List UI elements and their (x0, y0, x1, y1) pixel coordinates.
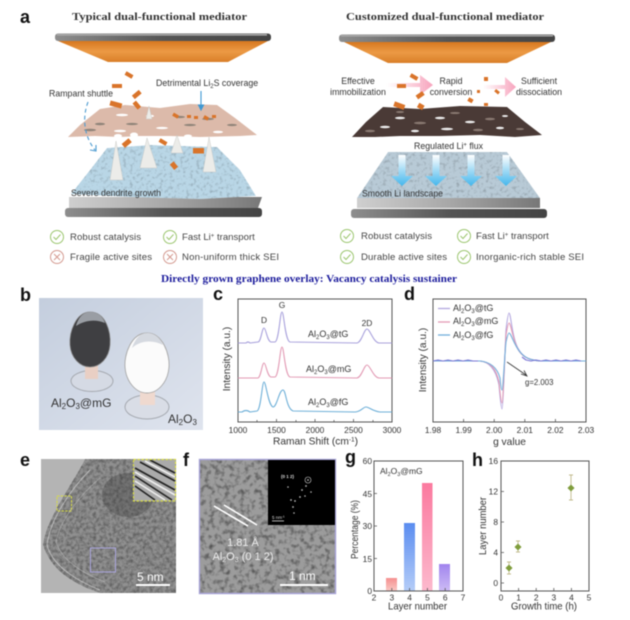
x tick labels (499, 592, 592, 602)
x tick labels: 3 (551, 592, 556, 602)
x tick labels: 1.98 (425, 425, 441, 435)
callout: regulated flux: flux (467, 141, 484, 151)
customized cell illustration (330, 34, 562, 218)
callout: Li2S coverage: 2 (210, 84, 214, 90)
y tick labels: 12 (489, 486, 498, 496)
series label tG: @tG (330, 329, 348, 339)
chart label: 3 (397, 472, 400, 478)
legend: 3 (471, 322, 475, 328)
panel label d: d (404, 284, 415, 304)
label: Al2O3: Al (168, 412, 179, 426)
series label mG: 2 (314, 370, 318, 376)
callout: effective immobilization (330, 76, 386, 97)
arrow: coverage pointer (198, 91, 204, 110)
x axis title: -1 (349, 436, 355, 444)
x tick labels: 2000 (306, 425, 325, 435)
panel a: dual-functional mediator schematics (20, 7, 584, 285)
arrows: regulated Li+ flux (391, 155, 517, 186)
panel f: HRTEM image (183, 450, 336, 594)
callout: sufficient dissociation: Sufficient (521, 76, 558, 86)
y tick labels: 60 (363, 456, 372, 466)
smooth lithium anode (351, 152, 547, 218)
panel label a: a (20, 7, 31, 27)
arrows: pink conversion flow (387, 75, 516, 97)
arrow: dashed shuttle path (85, 102, 96, 151)
item: fast transport: transport (508, 231, 549, 242)
scale bar 5 nm: 5 nm (137, 570, 164, 584)
baseline noise (433, 357, 581, 361)
y tick labels: 16 (489, 456, 498, 466)
item: fast transport: + (211, 234, 215, 240)
x tick labels: 4 (569, 592, 574, 602)
series label mG: O (317, 364, 324, 374)
y axis title: Intensity (a.u.) (418, 328, 429, 392)
chart label: 2 (388, 472, 391, 478)
legend (438, 303, 498, 342)
axes frame (501, 461, 589, 591)
series label fG: @fG (330, 397, 348, 407)
legend: O (464, 316, 471, 326)
label: Al2O3: O (183, 412, 192, 426)
vial: Al2O3@mG (70, 312, 113, 392)
series label fG: 3 (326, 403, 330, 409)
inset with lattice fringes (134, 460, 176, 501)
x tick labels: 2.01 (517, 425, 533, 435)
callout: rapid conversion (430, 76, 472, 97)
cathode plate with orange layer (55, 34, 271, 62)
x tick labels: 2 (372, 592, 377, 602)
x tick labels: 5 (587, 592, 592, 602)
heading: typical mediator: Typical dual-functional mediator (72, 12, 247, 23)
yellow selection box (57, 496, 72, 511)
purple selection box (90, 548, 116, 572)
lattice annotation (212, 536, 274, 564)
legend: Al (453, 330, 461, 340)
x tick labels: 1500 (267, 425, 286, 435)
legend: Al (453, 316, 461, 326)
curve: Al2O3@fG (433, 333, 586, 390)
micrograph (200, 460, 336, 594)
y tick labels: 30 (363, 521, 372, 531)
legend: 2 (461, 309, 465, 315)
micrograph (41, 459, 176, 593)
item: fast transport: transport (214, 232, 255, 243)
x tick labels: 7 (461, 592, 466, 602)
lattice annotation: Al (212, 551, 222, 563)
data points with error bars (505, 475, 575, 574)
item: fast transport: + (505, 232, 509, 238)
label: Al2O3@mG: 3 (75, 402, 80, 411)
panel label c: c (213, 284, 223, 304)
lattice spacing lines (214, 505, 257, 526)
callout: rampant shuttle: Rampant shuttle (49, 88, 113, 98)
heading: customized mediator: Customized dual-functional mediator (346, 12, 544, 23)
legend: 3 (471, 309, 475, 315)
peak label 2D: 2D (362, 318, 372, 328)
x tick labels: 0 (499, 592, 504, 602)
x axis title: ) (355, 436, 358, 448)
FFT inset: -1 (282, 514, 285, 518)
annotation arrow to g value (507, 362, 527, 376)
callout: effective immobilization: immobilization (330, 87, 386, 97)
callout: Li2S coverage: S coverage (214, 78, 258, 88)
y tick labels: 15 (363, 554, 372, 564)
legend: @tG (475, 303, 493, 313)
x tick labels: 2.02 (547, 425, 564, 435)
orange polysulfide particles (109, 71, 216, 170)
y tick labels: 0 (493, 578, 498, 588)
lattice annotation: 3 (235, 557, 239, 564)
y tick labels (363, 456, 372, 596)
callout: sufficient dissociation: dissociation (516, 87, 562, 97)
callout: rapid conversion: Rapid (440, 76, 463, 86)
panel g: layer distribution bar chart (345, 447, 466, 612)
item: fragile sites: Fragile active sites (70, 252, 152, 263)
x tick labels (229, 425, 402, 435)
item: robust catalysis (50, 230, 141, 244)
x tick labels: 3 (389, 592, 394, 602)
photo background (39, 298, 203, 430)
typical cell illustration (49, 34, 271, 217)
series label tG: O (319, 329, 326, 339)
scale bar 5 nm (136, 570, 170, 586)
item: fast transport: Fast Li (182, 232, 211, 243)
y axis title: Layer number (478, 496, 489, 555)
x axis title: Raman Shift (cm (273, 436, 349, 448)
panel b: sample photograph (20, 285, 203, 430)
cathode plate with orange layer (339, 34, 555, 63)
panel c: Raman spectra (213, 284, 402, 448)
item: fragile sites (50, 250, 152, 264)
x axis title: g value (493, 437, 526, 448)
x tick labels (425, 425, 594, 435)
item: fast transport: Fast Li (476, 231, 505, 242)
chart label: O (391, 466, 398, 476)
axes frame (238, 299, 392, 422)
damaged pink membrane (68, 104, 257, 138)
dark graphene membrane (352, 106, 542, 137)
lithium anode with blue surface (65, 145, 262, 217)
series label mG: @mG (328, 364, 351, 374)
item: fast transport (458, 230, 549, 242)
axes frame (433, 299, 586, 422)
y axis title: Percentage (%) (350, 500, 361, 559)
y tick labels: 8 (493, 517, 498, 527)
legend: 2 (461, 322, 465, 328)
curve: Al2O3@tG (433, 313, 586, 409)
callout: rapid conversion: conversion (430, 87, 472, 97)
y tick labels: 45 (363, 489, 372, 499)
legend: Al (453, 303, 461, 313)
x axis title: Layer number (388, 602, 448, 612)
x tick labels: 1000 (229, 425, 248, 435)
curve: Al2O3@tG (238, 312, 392, 343)
series label mG: 3 (324, 370, 328, 376)
label: Al2O3@mG: @mG (80, 396, 111, 410)
x tick labels: 4 (407, 592, 412, 602)
callout: regulated flux: + (463, 142, 467, 148)
curve: Al2O3@fG (238, 382, 392, 412)
chart label: Al (380, 466, 388, 476)
callout: effective immobilization: Effective (341, 76, 375, 86)
scale bar 1 nm (280, 569, 328, 586)
item: durable sites (340, 250, 447, 264)
orange particles (393, 73, 500, 110)
legend: @mG (475, 316, 498, 326)
series label fG: O (319, 397, 326, 407)
y axis title: Intensity (a.u.) (222, 327, 233, 391)
scale bar 1 nm: 1 nm (289, 569, 316, 583)
callout: regulated flux: Regulated Li (414, 141, 463, 151)
callout: sufficient dissociation (516, 76, 562, 97)
curve: Al2O3@mG (433, 323, 586, 403)
caption: graphene overlay: Directly grown graphene overlay: Vacancy catalysis sustainer (161, 274, 458, 285)
series label mG: Al (306, 364, 314, 374)
legend: 2 (461, 336, 465, 342)
checklist: typical mediator (50, 230, 279, 264)
item: non-uniform SEI: Non-uniform thick SEI (182, 252, 279, 263)
curve: Al2O3@mG (238, 347, 392, 378)
legend: O (464, 330, 471, 340)
peak label D: D (261, 315, 267, 325)
item: fast transport (164, 230, 255, 244)
series label tG: Al (308, 329, 316, 339)
x tick labels: 6 (443, 592, 448, 602)
panel d: EPR spectra (404, 284, 594, 448)
x tick labels: 2 (534, 592, 539, 602)
lattice annotation: O (226, 551, 235, 563)
x tick labels: 2500 (344, 425, 363, 435)
chart label: @mG (400, 466, 423, 476)
series label tG: 2 (316, 335, 320, 341)
x tick labels: 5 (425, 592, 430, 602)
legend: @fG (475, 330, 493, 340)
axes frame (374, 461, 463, 591)
lattice annotation: (0 1 2) (239, 551, 274, 563)
series label tG: 3 (326, 335, 330, 341)
x tick labels (372, 592, 466, 602)
FFT inset: (0 1 2) (281, 474, 295, 479)
x tick labels: 3000 (383, 425, 402, 435)
y tick labels: 4 (493, 548, 498, 558)
label: Al2O3@mG: 2 (62, 402, 67, 411)
checklist: customized mediator (340, 230, 584, 264)
panel label e: e (20, 450, 30, 470)
lattice annotation: 1.81 Å (227, 536, 260, 549)
FFT inset (268, 460, 335, 525)
series label fG: 2 (316, 403, 320, 409)
panel h: layer number vs growth time (472, 450, 592, 612)
panel label f: f (183, 450, 190, 470)
callout: smooth landscape: Smooth Li landscape (362, 188, 443, 198)
vial: Al2O3 (125, 333, 169, 419)
y tick labels: 0 (367, 586, 372, 596)
y tick labels (489, 456, 498, 588)
callout: Li2S coverage: Detrimental Li (156, 78, 210, 88)
panel label h: h (472, 450, 483, 470)
item: robust catalysis (340, 230, 432, 242)
legend: O (464, 303, 471, 313)
label: Al2O3@mG: Al (51, 396, 62, 410)
x tick labels: 2.03 (578, 425, 594, 435)
legend: 3 (471, 336, 475, 342)
item: robust catalysis: Robust catalysis (361, 231, 432, 242)
x tick labels: 2.00 (486, 425, 503, 435)
series label fG: Al (308, 397, 316, 407)
x axis title: Growth time (h) (511, 602, 577, 612)
panel label b: b (20, 285, 31, 305)
item: inorganic-rich SEI: Inorganic-rich stable SEI (476, 252, 584, 263)
bars (386, 483, 450, 591)
x tick labels: 1.99 (455, 425, 472, 435)
lithium dendrites (110, 106, 216, 180)
annotation g value: g=2.003 (525, 378, 553, 387)
peak label G: G (279, 300, 285, 310)
callout: dendrite growth: Severe dendrite growth (71, 188, 161, 198)
item: durable sites: Durable active sites (361, 252, 447, 263)
label: Al2O3: 2 (179, 418, 184, 427)
label: Al2O3@mG: O (66, 396, 75, 410)
panel label g: g (345, 447, 356, 467)
panel e: TEM image (20, 450, 176, 593)
lattice annotation: 2 (222, 557, 226, 564)
label: Al2O3: 3 (192, 418, 197, 427)
item: robust catalysis: Robust catalysis (70, 232, 141, 243)
FFT inset: 5 nm (272, 515, 282, 520)
x tick labels: 1 (516, 592, 521, 602)
